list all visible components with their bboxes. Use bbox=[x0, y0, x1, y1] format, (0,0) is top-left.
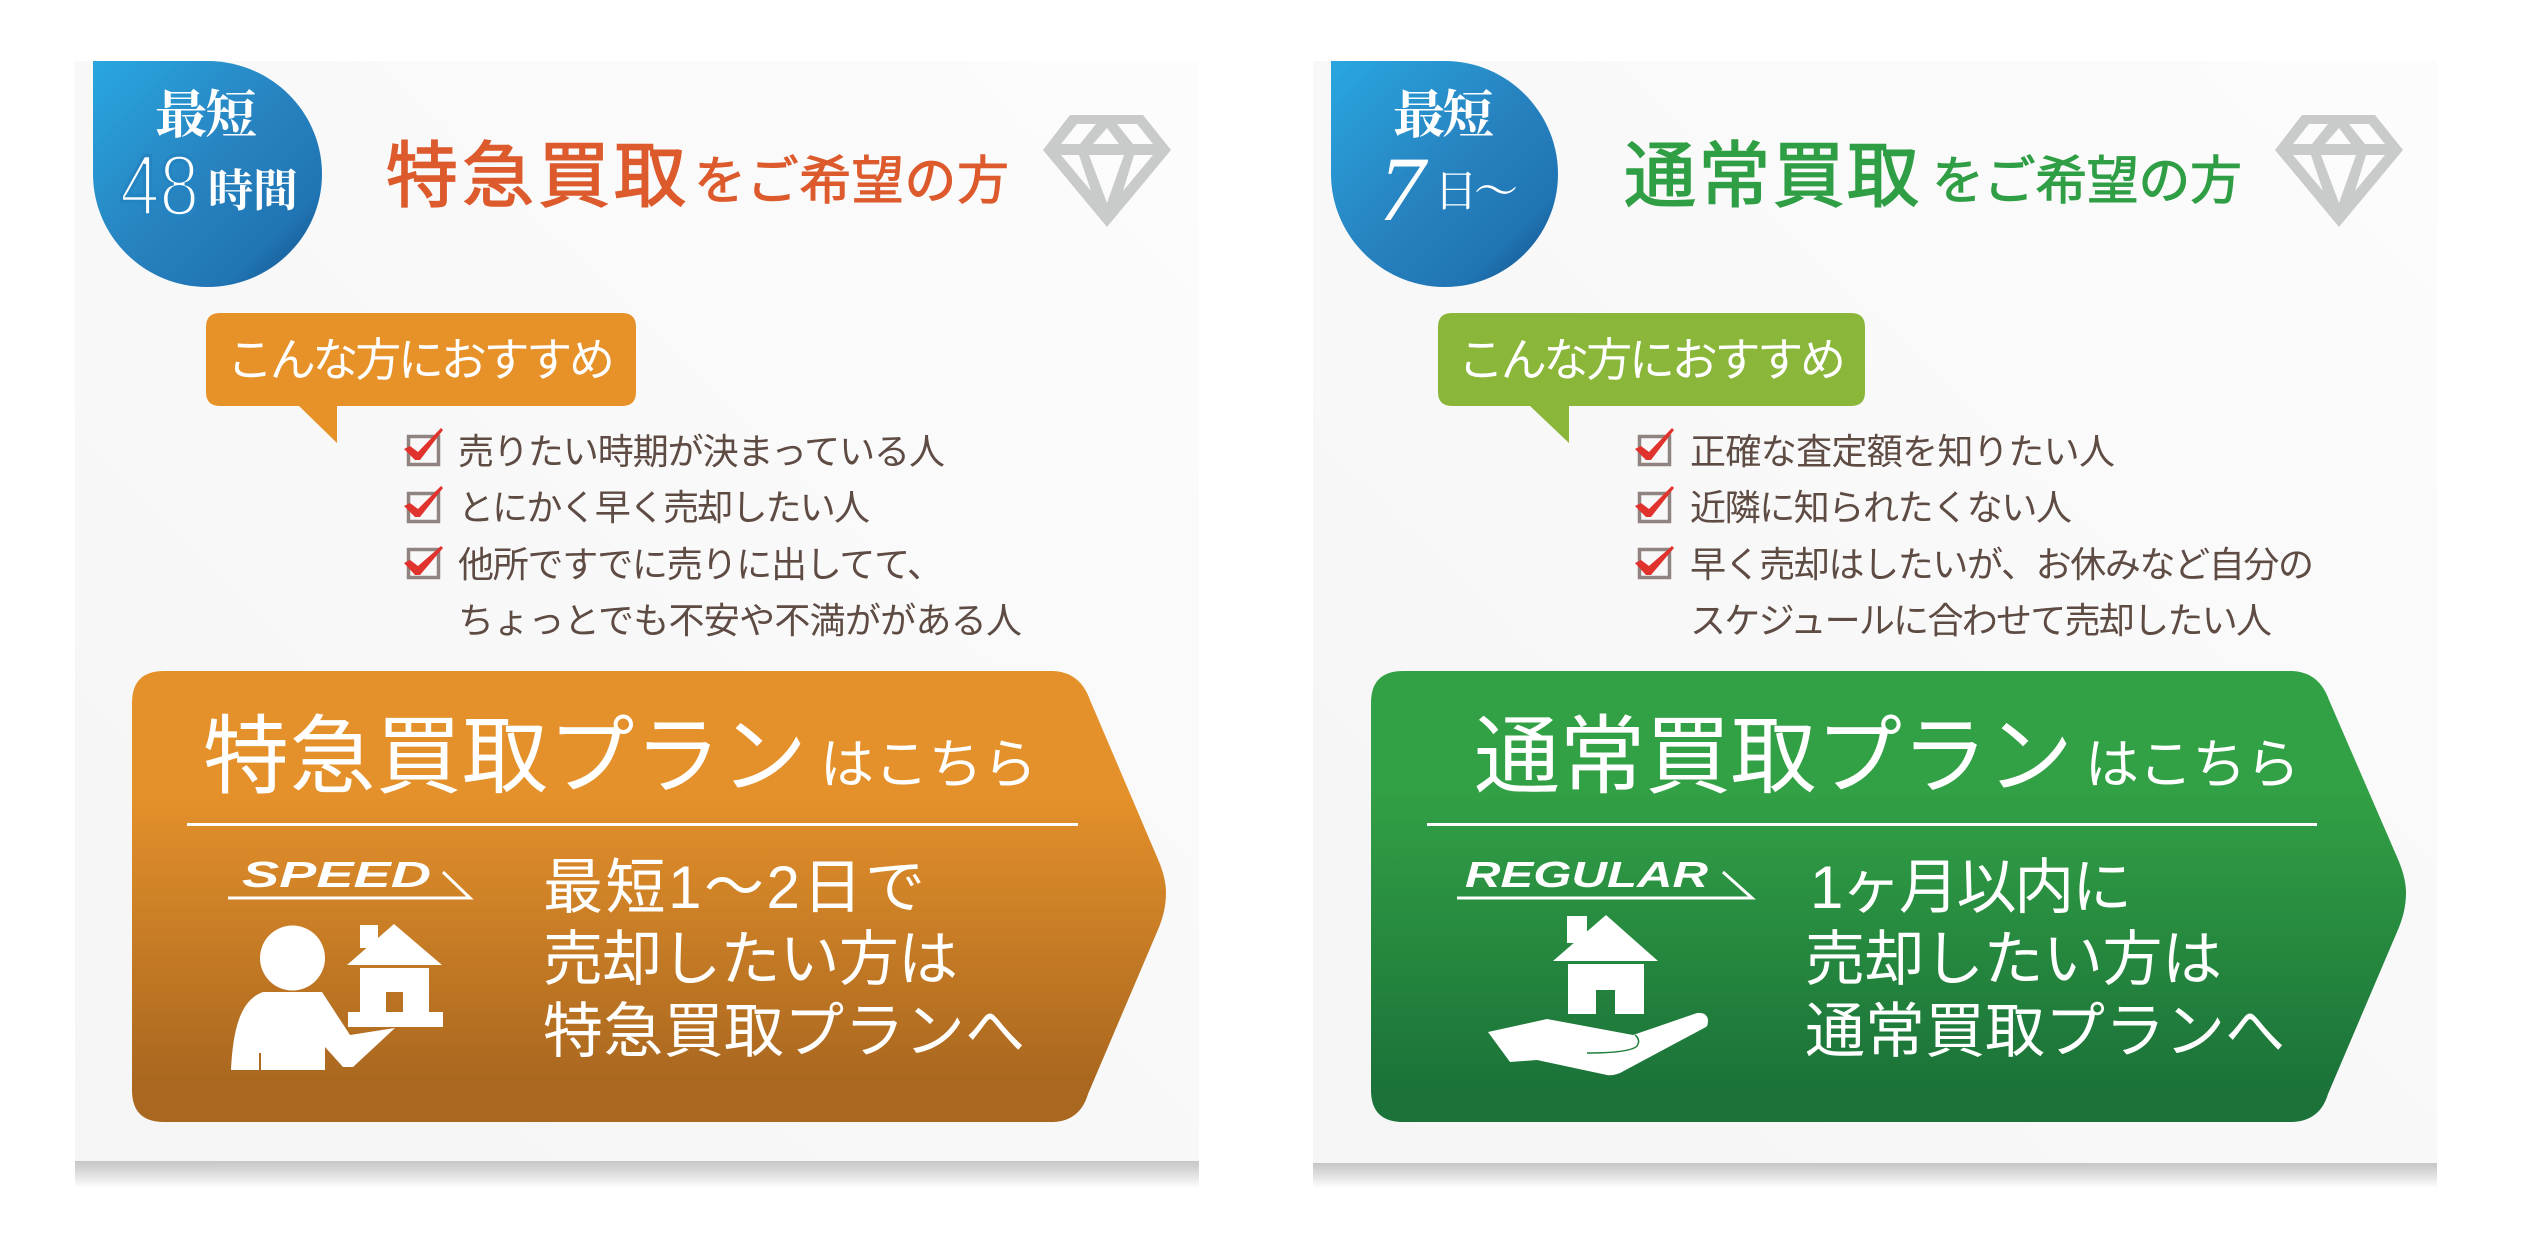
badge: 最短48時間: 48 bbox=[120, 138, 199, 234]
button body text: 特急買取プランへ bbox=[543, 998, 1025, 1065]
button: 特急買取プラン bbox=[132, 671, 1166, 1122]
badge: 最短7日〜 bbox=[1331, 61, 1558, 287]
button heading: 通常買取プラン bbox=[1474, 709, 2073, 805]
label: SPEED: SPEED bbox=[242, 854, 431, 895]
item 3 continued: ちょっとでも不安や不満ががある人 bbox=[458, 600, 1022, 641]
title: をご希望の方 bbox=[694, 153, 1009, 211]
callout: こんな方におすすめ bbox=[206, 313, 636, 443]
title: 特急買取 bbox=[386, 137, 686, 217]
panel background bbox=[75, 61, 1199, 1188]
icon: person holding house bbox=[231, 924, 443, 1070]
check 1 bbox=[404, 428, 443, 464]
item 3: 他所ですでに売りに出してて、 bbox=[458, 544, 943, 585]
callout: こんな方におすすめ: こんな方におすすめ bbox=[227, 334, 615, 386]
check 2 bbox=[1635, 486, 1674, 522]
badge: 最短48時間: 時間 bbox=[208, 166, 298, 216]
button: 通常買取プラン bbox=[1371, 671, 2406, 1122]
button heading: はこちら bbox=[2085, 735, 2300, 795]
panel: 通常買取 bbox=[1313, 61, 2437, 1188]
item 2: 近隣に知られたくない人 bbox=[1690, 487, 2072, 528]
icon: diamond bbox=[2275, 115, 2403, 227]
icon: hand holding house bbox=[1488, 915, 1708, 1075]
label: REGULAR bbox=[1457, 854, 1752, 898]
check 3 bbox=[404, 546, 443, 578]
badge: 最短7日〜: 日〜 bbox=[1434, 167, 1518, 216]
button heading: はこちら bbox=[820, 735, 1037, 795]
button body text: 1ヶ月以内に bbox=[1810, 854, 2132, 921]
item 3 continued: スケジュールに合わせて売却したい人 bbox=[1690, 600, 2272, 641]
button body text: 売却したい方は bbox=[543, 926, 958, 993]
button body text: 売却したい方は bbox=[1805, 926, 2222, 993]
title bbox=[386, 137, 1009, 217]
button body text: 通常買取プランへ bbox=[1805, 998, 2285, 1065]
title: 通常買取 bbox=[1624, 137, 1919, 217]
item 2: とにかく早く売却したい人 bbox=[458, 487, 870, 528]
badge: 最短48時間: 最短 bbox=[155, 88, 257, 145]
button body text: 最短1〜2日で bbox=[543, 854, 925, 921]
label: REGULAR: REGULAR bbox=[1465, 854, 1708, 895]
badge: 最短7日〜: 7 bbox=[1379, 138, 1429, 240]
icon: diamond bbox=[1043, 115, 1171, 227]
checklist bbox=[404, 428, 1022, 641]
badge: 最短48時間 bbox=[93, 61, 322, 287]
checklist bbox=[1635, 428, 2314, 641]
button body text bbox=[1805, 854, 2285, 1065]
check 1 bbox=[1635, 428, 1674, 464]
item 1: 正確な査定額を知りたい人 bbox=[1690, 431, 2115, 472]
item 3: 早く売却はしたいが、お休みなど自分の bbox=[1690, 544, 2314, 585]
panel: 特急買取 bbox=[75, 61, 1199, 1188]
badge: 最短7日〜: 最短 bbox=[1393, 88, 1494, 145]
callout: こんな方におすすめ bbox=[1438, 313, 1865, 443]
title bbox=[1624, 137, 2242, 217]
label: SPEED bbox=[228, 854, 470, 898]
item 1: 売りたい時期が決まっている人 bbox=[458, 431, 945, 472]
callout: こんな方におすすめ: こんな方におすすめ bbox=[1458, 334, 1846, 386]
check 2 bbox=[404, 486, 443, 522]
title: をご希望の方 bbox=[1932, 153, 2242, 211]
check 3 bbox=[1635, 546, 1674, 578]
button heading: 特急買取プラン bbox=[203, 709, 807, 805]
button body text bbox=[543, 854, 1025, 1065]
panel background bbox=[1313, 61, 2437, 1188]
